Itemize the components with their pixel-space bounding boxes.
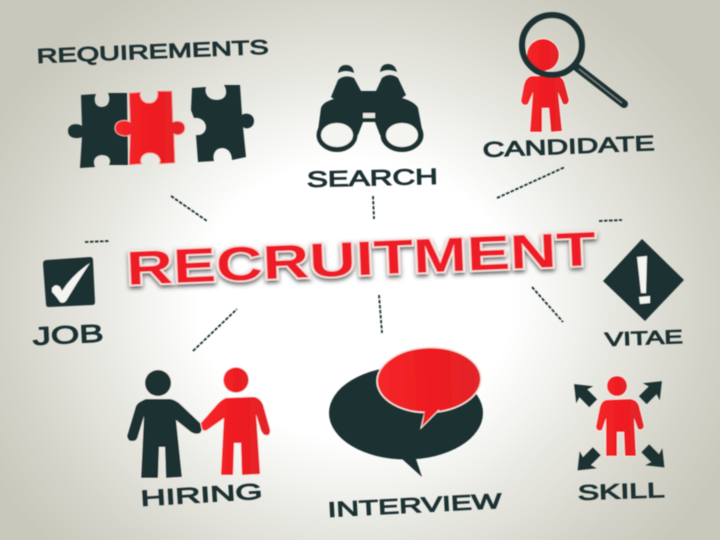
icon: hiring handshake figures — [127, 368, 270, 478]
dashed connector lines — [85, 167, 622, 351]
heading: candidate: CANDIDATE — [482, 132, 655, 162]
heading: vitae: VITAE — [604, 327, 683, 351]
heading: search: SEARCH — [307, 164, 438, 192]
icon: interview speech bubbles — [329, 346, 483, 477]
title: recruitment: RECRUITMENT — [125, 223, 597, 296]
icon: binoculars — [316, 64, 424, 152]
icon: vitae warning diamond — [603, 239, 684, 321]
heading: hiring: HIRING — [140, 479, 263, 511]
heading: interview: INTERVIEW — [327, 490, 502, 522]
icon: candidate under magnifying glass — [521, 15, 624, 132]
heading: requirements: REQUIREMENTS — [36, 37, 269, 68]
heading: skill: SKILL — [577, 479, 665, 505]
heading: job: JOB — [32, 320, 104, 351]
icon: job checkbox — [43, 257, 95, 307]
icon: skill figure with arrows — [566, 373, 673, 479]
icon: puzzle pieces — [68, 85, 254, 168]
